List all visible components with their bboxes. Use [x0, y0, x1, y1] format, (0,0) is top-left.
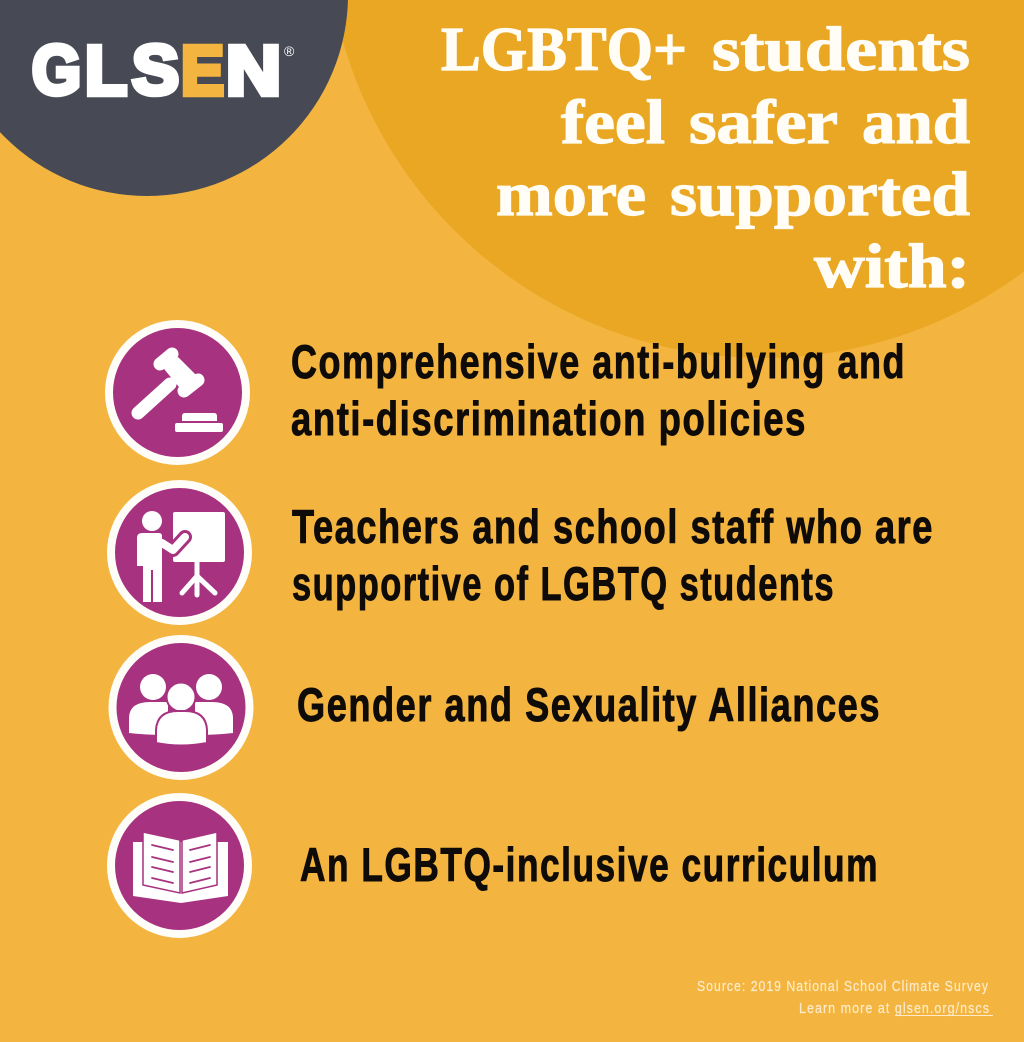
title: and — [862, 89, 970, 157]
icon: gavel — [109, 324, 246, 461]
header circle — [326, 0, 1024, 358]
title: feel — [561, 89, 665, 157]
logo circle — [0, 0, 348, 196]
text: anti-bullying policies — [291, 335, 906, 445]
title: with: — [814, 233, 970, 301]
title: more — [496, 161, 646, 229]
title — [441, 16, 970, 301]
source note: Learn more at glsen.org/nscs — [799, 1001, 990, 1017]
logo: GLSEN: G — [32, 31, 81, 109]
title: safer — [689, 89, 838, 157]
logo: GLSEN: S — [132, 31, 179, 109]
logo: GLSEN: L — [85, 32, 127, 110]
logo: GLSEN — [32, 31, 295, 110]
icon: open book — [111, 797, 248, 934]
text: supportive staff — [292, 500, 934, 610]
title: students — [712, 16, 970, 84]
logo: GLSEN: N — [226, 32, 281, 110]
title: supported — [670, 161, 970, 229]
source note — [697, 979, 993, 1017]
text: anti-bullying policies: anti-discrimination policies — [291, 392, 807, 445]
icon: group of people — [112, 639, 250, 776]
icon: teacher at board — [111, 484, 248, 621]
text: supportive staff: supportive of LGBTQ students — [292, 557, 835, 610]
logo: GLSEN: ® — [284, 43, 295, 59]
logo: GLSEN: E — [181, 32, 224, 110]
title: LGBTQ+ — [441, 16, 687, 84]
